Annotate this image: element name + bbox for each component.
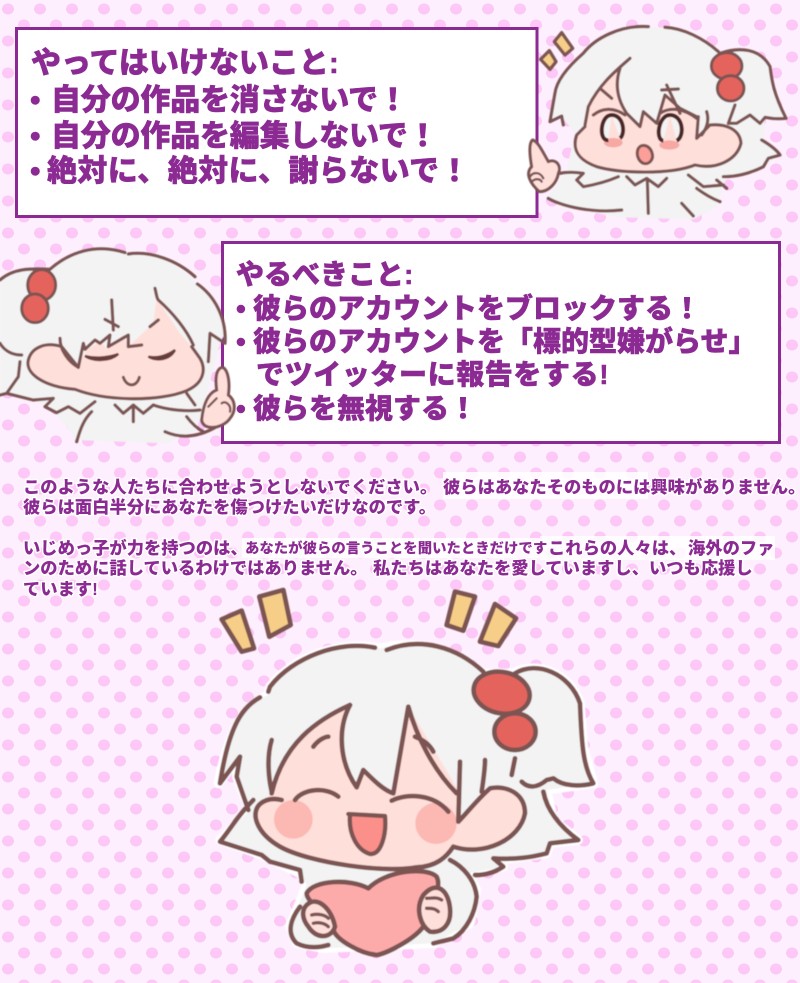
- list: do not do items: 自分の作品を消さないで！: [51, 84, 408, 117]
- list: do not do items: [30, 84, 470, 188]
- list: do not do items: •: [30, 84, 41, 117]
- text block: message: [23, 477, 800, 599]
- panel: should do: [222, 242, 780, 442]
- list: should do items: 彼らのアカウントを「標的型嫌がらせ」: [253, 325, 756, 357]
- list: should do items: •: [236, 293, 246, 324]
- text block: message: これらの人々は、: [548, 538, 686, 558]
- text block: message: 私たちはあなたを愛していますし、いつも応援し: [373, 558, 753, 578]
- face: [255, 705, 525, 867]
- mouth: [348, 814, 385, 854]
- white highlight behind body text: [242, 472, 775, 560]
- text block: message: 彼らはあなたそのものには興味がありません。: [443, 477, 800, 497]
- list: should do items: •: [236, 326, 246, 357]
- text block: message: ンのために話しているわけではありません。: [23, 558, 368, 578]
- list: do not do items: 絶対に、絶対に、謝らないで！: [47, 155, 470, 188]
- list: should do items: 彼らを無視する！: [253, 393, 477, 424]
- text block: message: ています!: [23, 579, 98, 599]
- list: should do items: 彼らのアカウントをブロックする！: [253, 292, 701, 324]
- text block: message: 海外のファ: [688, 538, 774, 558]
- list: should do items: •: [236, 393, 246, 424]
- text block: message: あなたが彼らの言うことを聞いたときだけです: [245, 539, 547, 557]
- list: do not do items: •: [30, 155, 41, 188]
- hands: [303, 888, 450, 936]
- character: surprised girl pointing: [529, 27, 786, 219]
- exclamation marks: [222, 590, 516, 652]
- character: calm girl with raised finger: [0, 249, 234, 443]
- list: do not do items: •: [30, 120, 41, 153]
- character: happy girl holding heart: [218, 590, 593, 955]
- heart: [307, 871, 438, 955]
- text block: message: 彼らは面白半分にあなたを傷つけたいだけなのです。: [23, 497, 436, 517]
- list: should do items: でツイッターに報告をする!: [256, 359, 609, 390]
- text block: message: このような人たちに合わせようとしないでください。: [23, 477, 437, 497]
- heading: should do: やるべきこと:: [236, 259, 413, 290]
- list: should do items: [236, 292, 756, 424]
- heading: do not do: やってはいけないこと:: [31, 47, 339, 80]
- list: do not do items: 自分の作品を編集しないで！: [51, 120, 438, 153]
- hair and body: [218, 645, 593, 948]
- text block: message: いじめっ子が力を持つのは、: [23, 538, 248, 558]
- hair bow: [470, 667, 536, 750]
- panel: do not do: [16, 28, 537, 216]
